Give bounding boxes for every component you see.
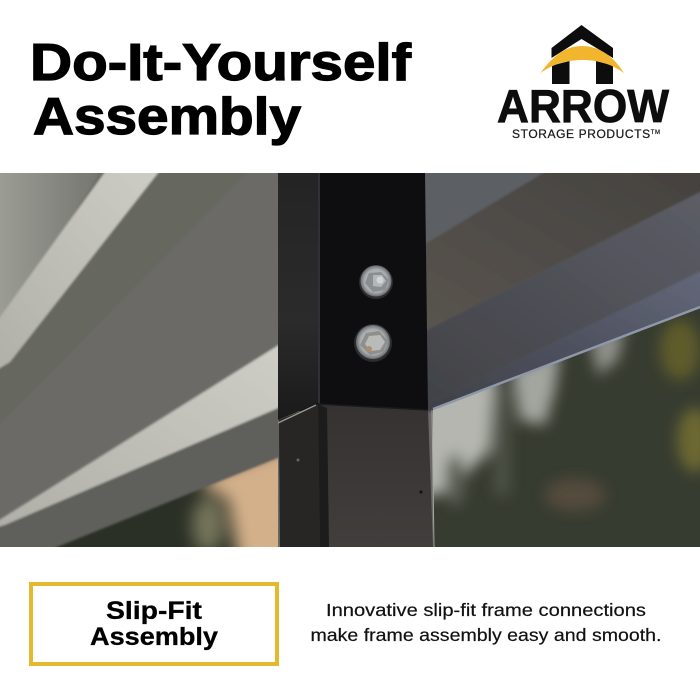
title: Assembly (33, 88, 301, 146)
lower post (279, 404, 433, 547)
icon: lower bolt (354, 324, 392, 362)
description text (310, 600, 662, 645)
logo wordmark: ARROW (497, 80, 670, 132)
beam lower edge highlight (433, 307, 700, 409)
callout box: Slip-Fit Assembly (31, 584, 277, 664)
callout box: Slip-Fit Assembly: Assembly (90, 623, 218, 651)
photo: sunset sky and trees left (55, 456, 278, 547)
photo: roof panels right (415, 155, 700, 412)
title: Do-It-Yourself (30, 34, 412, 92)
logo: Arrow Storage Products (497, 25, 670, 141)
upper post left face (278, 173, 318, 420)
slip joint seam (278, 405, 316, 423)
icon: yellow arc (540, 46, 624, 73)
icon: upper bolt (359, 265, 393, 299)
logo tagline: STORAGE PRODUCTS (512, 127, 650, 141)
icon: house doors (552, 61, 613, 84)
title (30, 34, 412, 146)
photo: black steel post (278, 173, 434, 547)
photo background (0, 173, 433, 547)
photo: slip-fit frame connection (0, 173, 700, 547)
photo: blurred trees right (433, 308, 700, 547)
lower post left face (279, 404, 320, 547)
description text: make frame assembly easy and smooth. (310, 625, 662, 645)
callout box: Slip-Fit Assembly: Slip-Fit (106, 597, 203, 625)
logo tagline: TM (651, 130, 660, 136)
description text: Innovative slip-fit frame connections (326, 600, 646, 620)
photo: roof panels left (0, 150, 290, 560)
lower post corner shadow (318, 404, 329, 547)
upper post sleeve (300, 173, 428, 411)
icon: house roof (552, 25, 613, 58)
